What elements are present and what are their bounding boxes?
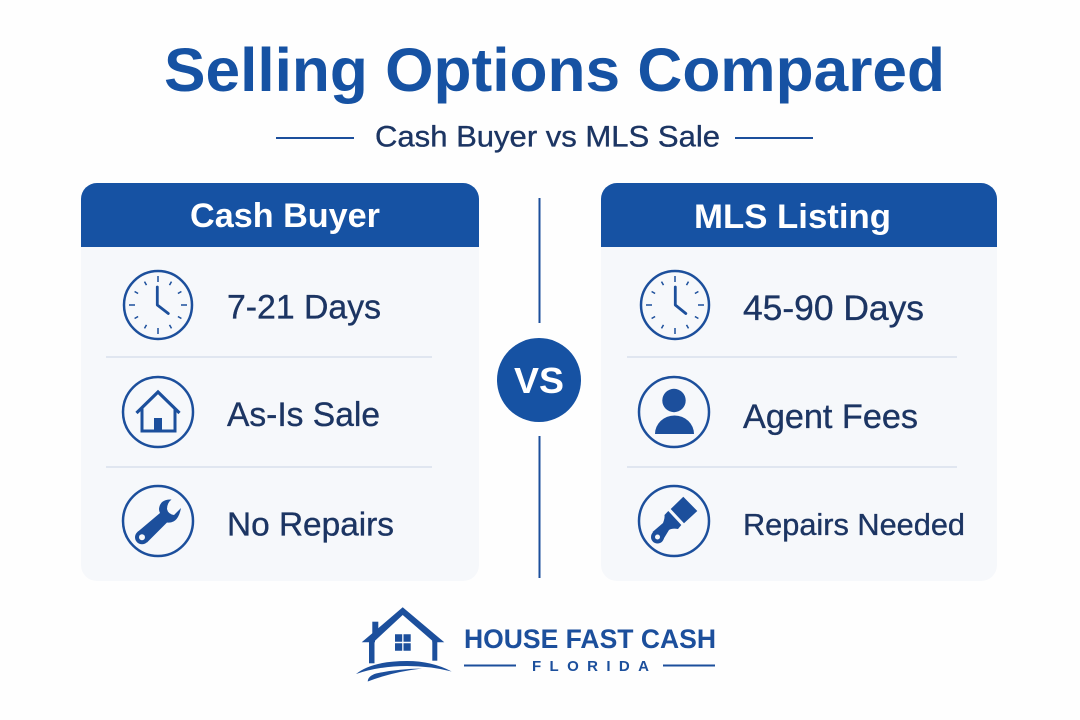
panel: mls listing [601, 183, 997, 581]
mls listing header [601, 183, 997, 247]
panel: cash buyer [81, 183, 479, 581]
divider with vs badge [497, 198, 581, 578]
logo [356, 607, 716, 682]
logo wordmark: HOUSE FAST CASH [464, 624, 716, 654]
label: Agent Fees: Agent Fees [743, 398, 918, 436]
logo icon: house [356, 607, 452, 682]
icon: clock [641, 271, 709, 339]
icon: person [639, 377, 709, 447]
icon: paintbrush [639, 486, 709, 556]
icon: house [123, 377, 193, 447]
logo tagline: FLORIDA [532, 658, 649, 675]
label: 7-21 Days: 7-21 Days [227, 288, 381, 326]
mls listing header: MLS Listing [694, 198, 891, 236]
label: No Repairs: No Repairs [227, 506, 394, 544]
icon: wrench [123, 486, 193, 556]
label: 45-90 Days: 45-90 Days [743, 289, 924, 328]
icon: clock [124, 271, 192, 339]
label: Repairs Needed: Repairs Needed [743, 507, 965, 542]
divider with vs badge: VS [514, 360, 564, 401]
subtitle: Cash Buyer vs MLS Sale [375, 120, 720, 154]
label: As-Is Sale: As-Is Sale [227, 396, 380, 434]
cash buyer header [81, 183, 479, 247]
title: Selling Options Compared [164, 36, 945, 104]
cash buyer header: Cash Buyer [190, 197, 380, 235]
